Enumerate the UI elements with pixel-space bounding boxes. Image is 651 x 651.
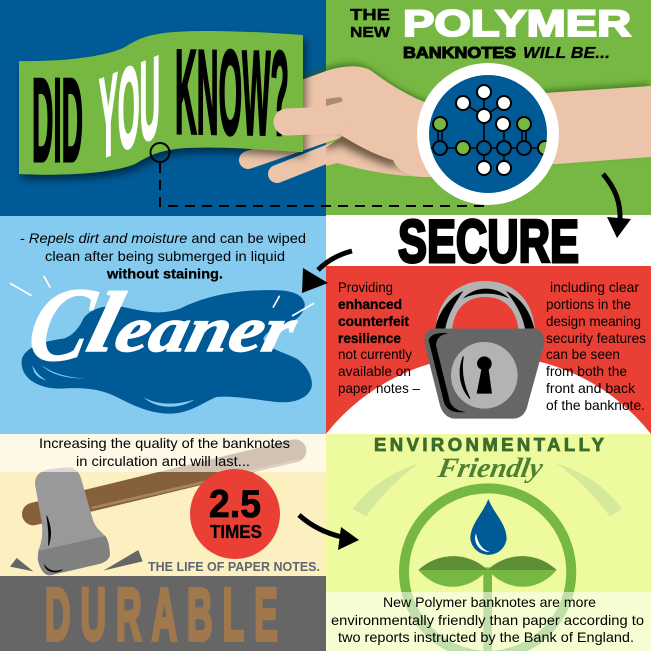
title: environmentally: ENVIRONMENTALLY xyxy=(374,434,605,455)
callout: 2.5 times: TIMES xyxy=(210,521,262,542)
text: cleaner description: - Repels dirt and moisture and can be wiped xyxy=(20,230,306,246)
text: durability lead in: in circulation and will last... xyxy=(76,453,250,469)
title: secure: SECURE xyxy=(398,208,579,275)
text: secure left: counterfeit xyxy=(338,313,409,329)
text: the life of paper notes: THE LIFE OF PAPER NOTES. xyxy=(148,559,320,574)
text: secure right: front and back xyxy=(546,380,636,396)
arrow: to secure xyxy=(603,174,631,238)
white arc xyxy=(326,355,651,434)
icon: padlock xyxy=(424,281,544,419)
text: environment description: New Polymer banknotes are more xyxy=(383,594,596,610)
panel: environmentally friendly xyxy=(326,434,651,651)
title: cleaner: leaner xyxy=(79,274,309,370)
panel: did you know xyxy=(0,0,651,216)
text: secure left: Providing xyxy=(338,279,393,295)
icon: seedling emblem xyxy=(353,463,622,651)
icon: thumb xyxy=(287,120,335,122)
heading: the new polymer banknotes will be: WILL BE... xyxy=(523,45,610,62)
callout: 2.5 times xyxy=(190,469,280,559)
text: secure right: from both the xyxy=(546,363,627,379)
panel: durable xyxy=(0,434,326,651)
icon: arm xyxy=(530,86,651,166)
text: cleaner description xyxy=(20,230,306,282)
icon: hammer xyxy=(10,451,300,575)
banner xyxy=(19,31,303,175)
icon: hand palm xyxy=(296,66,432,177)
text: secure left: available on xyxy=(338,363,411,379)
text: environment description: environmentally friendly than paper according to xyxy=(331,612,644,628)
heading: the new polymer banknotes will be: POLYMER xyxy=(403,3,631,44)
text: secure left: not currently xyxy=(338,346,412,362)
text: secure right: design meaning xyxy=(546,313,641,329)
title: friendly: Friendly xyxy=(435,453,546,484)
text: secure right: of the banknote. xyxy=(546,397,645,413)
icon: molecule watch xyxy=(417,63,559,205)
icon: puddle xyxy=(11,276,313,414)
title: did you know: DID xyxy=(32,54,83,187)
text: environment description: two reports instructed by the Bank of England. xyxy=(338,629,634,645)
text: durability lead in: Increasing the quality of the banknotes xyxy=(39,435,290,451)
callout: 2.5 times: 2.5 xyxy=(209,483,261,526)
icon: finger slit xyxy=(326,97,342,106)
text: secure left: resilience xyxy=(338,330,401,346)
title: cleaner xyxy=(19,266,309,384)
heading: the new polymer banknotes will be: BANKNOTES xyxy=(403,45,516,62)
panel: cleaner xyxy=(0,216,326,434)
translucent strip xyxy=(326,592,651,651)
title: did you know xyxy=(32,25,289,187)
icon: hand lower palm xyxy=(326,136,422,177)
translucent strip xyxy=(0,434,326,472)
text: secure left: enhanced xyxy=(338,296,402,312)
icon: dashed connector xyxy=(150,143,490,206)
text: secure right xyxy=(546,279,646,413)
text: secure left xyxy=(338,279,420,396)
icon: hand lower fingers xyxy=(248,130,340,174)
text: cleaner description: without staining. xyxy=(106,266,223,282)
text: cleaner description: clean after being submerged in liquid xyxy=(45,248,285,264)
heading: the new polymer banknotes will be: NEW xyxy=(350,24,391,41)
text: secure left: paper notes – xyxy=(338,380,420,396)
panel: secure xyxy=(326,208,651,434)
panel: did you know: KNOW? xyxy=(175,25,289,161)
panel: polymer heading background xyxy=(326,0,651,215)
text: secure right: portions in the xyxy=(546,296,631,312)
text: environment description xyxy=(331,594,644,645)
heading: the new polymer banknotes will be: THE xyxy=(350,7,390,24)
title: cleaner: C xyxy=(19,266,105,384)
text: durability lead in xyxy=(39,435,290,469)
arrow: to cleaner xyxy=(302,251,352,293)
text: secure right: can be seen xyxy=(546,346,620,362)
heading: the new polymer banknotes will be xyxy=(350,3,631,62)
text: secure right: security features xyxy=(546,330,646,346)
text: secure right: including clear xyxy=(550,279,639,295)
arrow: to environmentally friendly xyxy=(299,515,359,550)
